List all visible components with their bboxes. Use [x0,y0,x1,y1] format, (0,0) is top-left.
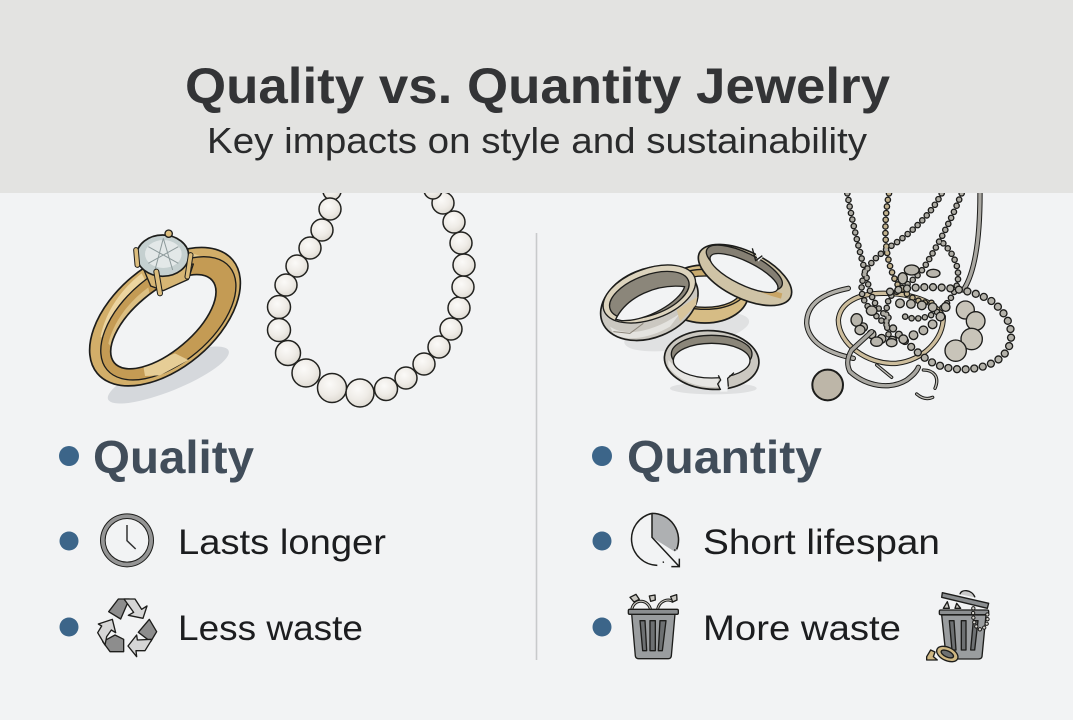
icon: recycle [98,599,157,657]
icon: trash can with rings [628,594,678,659]
panel: quality [59,431,386,657]
icon: overflowing trash can with jewelry [927,591,989,665]
illustration: worn and broken rings [589,232,801,394]
label: more waste: More waste [703,609,901,648]
label: less waste: Less waste [178,609,363,648]
bullet: more waste [592,618,612,636]
subtitle: Key impacts on style and sustainability [207,120,867,161]
label: lasts longer: Lasts longer [178,523,386,562]
icon: short-lifespan clock [632,513,679,567]
front worn ring [589,253,709,354]
label: short lifespan: Short lifespan [703,523,940,562]
illustration: gold diamond ring [64,220,266,414]
bottom broken ring [662,327,761,393]
header band [0,0,1073,193]
bullet: lasts longer [60,532,78,550]
bullet: less waste [60,618,78,636]
illustration: pearl necklace [268,181,475,407]
bullet: short lifespan [592,532,612,550]
heading: quantity: Quantity [627,431,822,483]
title: Quality vs. Quantity Jewelry [185,58,890,114]
heading: quality: Quality [93,431,254,483]
illustration: tangled chains and beads [807,193,1011,400]
back gold ring [662,265,748,323]
bullet: quality heading [59,446,79,466]
top right chipped ring [689,232,801,318]
panel: quantity [592,431,989,665]
icon: clock [100,513,154,567]
bullet: quantity heading [592,446,612,466]
